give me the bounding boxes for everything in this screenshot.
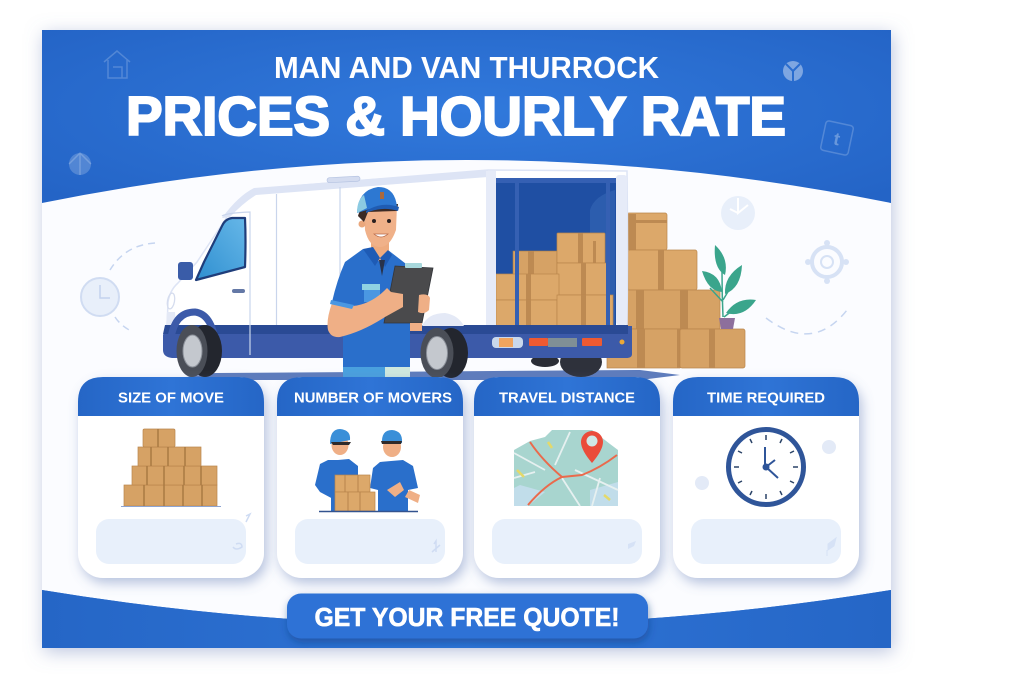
icon: box pyramid <box>121 429 221 506</box>
card header <box>277 377 463 416</box>
roof band <box>222 170 488 218</box>
forearm behind clipboard <box>410 323 422 331</box>
card heading: TIME REQUIRED <box>707 390 825 406</box>
card body <box>673 377 859 578</box>
top blue banner <box>42 30 891 230</box>
card heading: SIZE OF MOVE <box>118 390 224 406</box>
tie strip <box>379 260 385 276</box>
card header <box>673 377 859 416</box>
eyes and smile <box>372 219 391 237</box>
arm and hand <box>328 288 403 337</box>
map sheet <box>514 430 618 506</box>
stack of boxes beside van <box>607 213 745 368</box>
card: number of movers <box>277 377 463 578</box>
carried boxes <box>335 475 375 511</box>
icon: map with pin <box>514 430 618 506</box>
faint glyph <box>827 538 836 556</box>
card: size of move <box>78 377 264 578</box>
decorative banner icons <box>69 51 854 175</box>
icon: house <box>104 51 130 78</box>
van body <box>167 170 628 328</box>
clock ticks <box>734 435 798 499</box>
trousers <box>343 367 385 378</box>
sleeve band <box>330 300 354 309</box>
icon: clock <box>728 430 804 504</box>
empty value box <box>96 519 246 564</box>
card: time required <box>673 377 859 578</box>
plant <box>702 245 756 329</box>
location pin <box>581 431 603 463</box>
yellow road bits <box>517 442 610 500</box>
clock centre <box>762 464 770 470</box>
card heading: NUMBER OF MOVERS <box>294 390 452 406</box>
cap <box>357 187 399 213</box>
icon: faint clock <box>81 278 119 316</box>
roof vent <box>327 176 360 183</box>
cargo boxes <box>496 233 613 329</box>
rear wheel <box>420 328 468 378</box>
card body <box>474 377 660 578</box>
rear wheel arch <box>422 313 464 326</box>
decorative background icons on white <box>81 196 850 334</box>
cargo bars <box>496 178 616 332</box>
rear bumper lights <box>492 337 624 348</box>
dashed arc left <box>110 243 155 331</box>
headlight <box>166 293 176 309</box>
dashed arc right <box>766 306 850 334</box>
faint glyph <box>233 514 250 549</box>
side mirror <box>178 262 193 280</box>
door posts <box>486 171 627 325</box>
card: travel distance <box>474 377 660 578</box>
icon: note <box>820 120 854 156</box>
button shape <box>287 594 648 638</box>
interior highlight <box>590 190 615 325</box>
pocket <box>362 284 380 302</box>
front wheel arch <box>171 312 218 357</box>
icon: faint gear <box>805 240 849 284</box>
box second row <box>628 250 697 290</box>
infographic panel background <box>42 30 891 648</box>
neck <box>371 238 389 262</box>
clock hands <box>765 447 778 478</box>
stem <box>710 272 745 317</box>
card heading: TRAVEL DISTANCE <box>499 390 635 406</box>
clip <box>405 263 422 268</box>
right hand <box>418 294 430 313</box>
subtitle: MAN AND VAN THURROCK <box>274 50 660 85</box>
van <box>163 170 632 378</box>
map blocks <box>514 482 618 506</box>
card header <box>78 377 264 416</box>
windscreen <box>196 218 246 280</box>
icon: box globe left <box>69 153 91 175</box>
leaves <box>702 245 756 314</box>
cargo interior <box>496 179 616 325</box>
card body <box>277 377 463 578</box>
box third row <box>627 290 720 329</box>
ground shadow <box>165 370 680 380</box>
main title: PRICES & HOURLY RATE <box>126 85 786 147</box>
icon: faint dial <box>721 196 755 230</box>
shirt <box>332 249 410 368</box>
route <box>528 442 617 505</box>
dark trim <box>163 325 628 334</box>
button label: GET YOUR FREE QUOTE! <box>314 604 620 632</box>
bottom blue band <box>42 590 891 648</box>
front fender patch <box>166 312 176 326</box>
box bottom right <box>680 329 745 368</box>
door handle <box>232 289 245 293</box>
white central area <box>42 160 891 625</box>
clock face <box>728 430 804 504</box>
faint glyph <box>432 541 440 552</box>
ground line <box>319 510 418 512</box>
rear wheel under bumper <box>531 347 602 377</box>
clipboard <box>384 266 433 323</box>
trouser patch <box>385 367 410 378</box>
box top <box>627 213 667 250</box>
mover with clipboard <box>328 187 433 378</box>
front wheel <box>176 325 222 377</box>
empty value box <box>492 519 642 564</box>
box bottom left <box>607 329 682 368</box>
icon: note: t <box>832 129 842 149</box>
left mover <box>315 429 358 511</box>
ear <box>358 220 366 228</box>
door lines <box>222 187 340 355</box>
faint splat left <box>695 476 709 490</box>
empty value box <box>691 519 841 564</box>
face <box>364 205 397 247</box>
card header <box>474 377 660 416</box>
faint splat right <box>822 440 836 454</box>
faint glyph <box>628 541 636 549</box>
right mover <box>370 430 420 511</box>
card body <box>78 377 264 578</box>
hair <box>358 204 398 222</box>
side roads <box>514 432 618 506</box>
call to action button <box>287 594 648 638</box>
lower blue stripe <box>163 326 632 358</box>
icon: two movers <box>315 429 420 512</box>
pot <box>719 318 735 329</box>
empty value box <box>295 519 445 564</box>
collar <box>363 247 392 267</box>
icon: globe right <box>783 61 803 81</box>
